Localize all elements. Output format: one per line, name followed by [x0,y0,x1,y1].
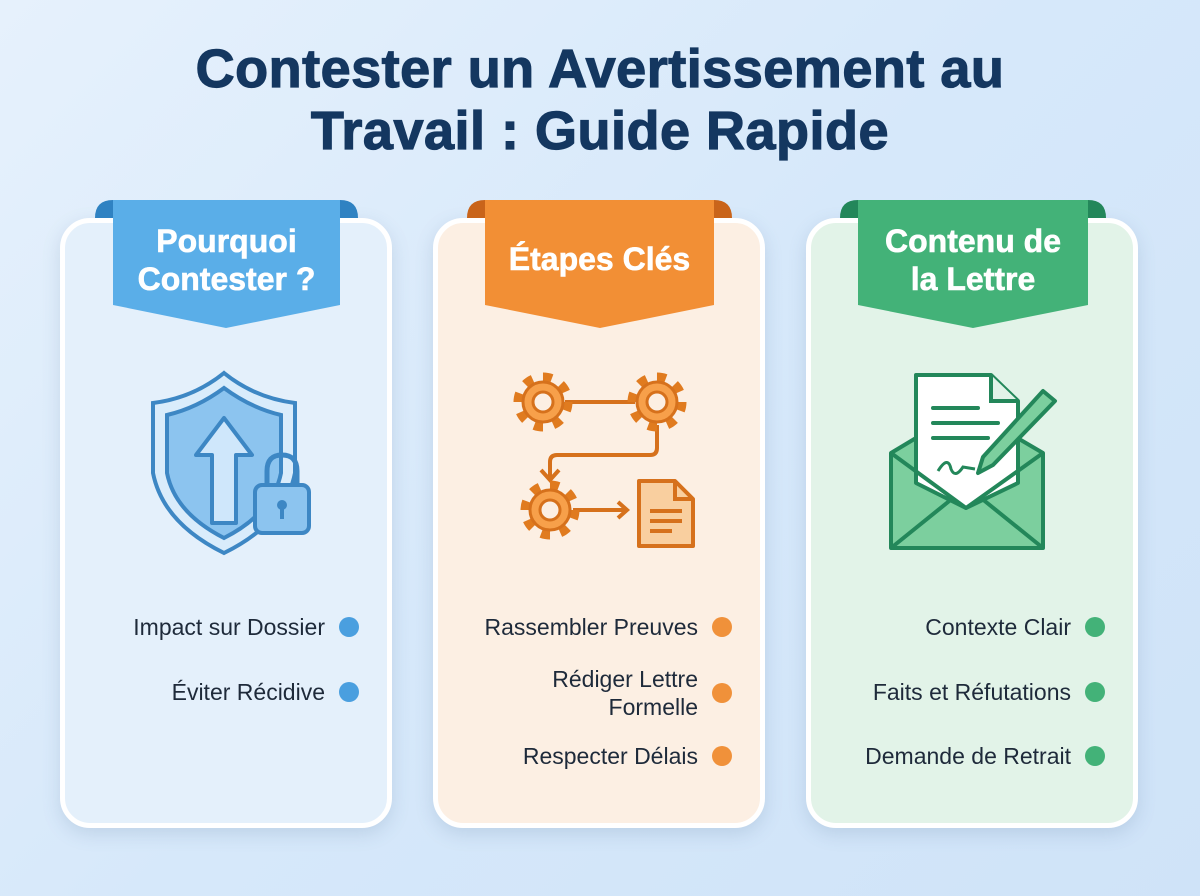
heading: contenu de la lettre: Contenu de [885,223,1061,259]
panel: pourquoi contester [60,218,392,828]
title: Travail : Guide Rapide [311,101,889,161]
icon: envelope with letter and pen [889,373,1058,550]
bullet: faits et refutations: Faits et Réfutations [873,679,1071,705]
heading: contenu de la lettre: la Lettre [911,261,1035,297]
title: Contester un Avertissement au [196,39,1004,99]
heading: etapes cles: Étapes Clés [509,241,690,277]
bullet: rediger lettre formelle [552,666,732,720]
heading: pourquoi contester: Pourquoi [156,223,297,259]
panel: etapes cles [433,218,765,828]
bullet: rediger lettre formelle: Formelle [609,694,698,720]
panel: contenu de la lettre [806,218,1138,828]
bullet: rassembler preuves: Rassembler Preuves [485,614,698,640]
bullet: impact sur dossier: Impact sur Dossier [133,614,325,640]
ribbons [95,200,1106,328]
icon: shield with arrow and lock [151,370,311,556]
heading: pourquoi contester: Contester ? [138,261,315,297]
heading: pourquoi contester [138,223,315,297]
bullet: eviter recidive: Éviter Récidive [172,679,325,705]
title [196,39,1004,161]
bullet: respecter delais: Respecter Délais [523,743,698,769]
bullet: contexte clair: Contexte Clair [925,614,1071,640]
bullet: demande de retrait: Demande de Retrait [865,743,1071,769]
icon: gears process [514,372,695,548]
bullet: rediger lettre formelle: Rédiger Lettre [552,666,698,692]
heading: contenu de la lettre [885,223,1061,297]
